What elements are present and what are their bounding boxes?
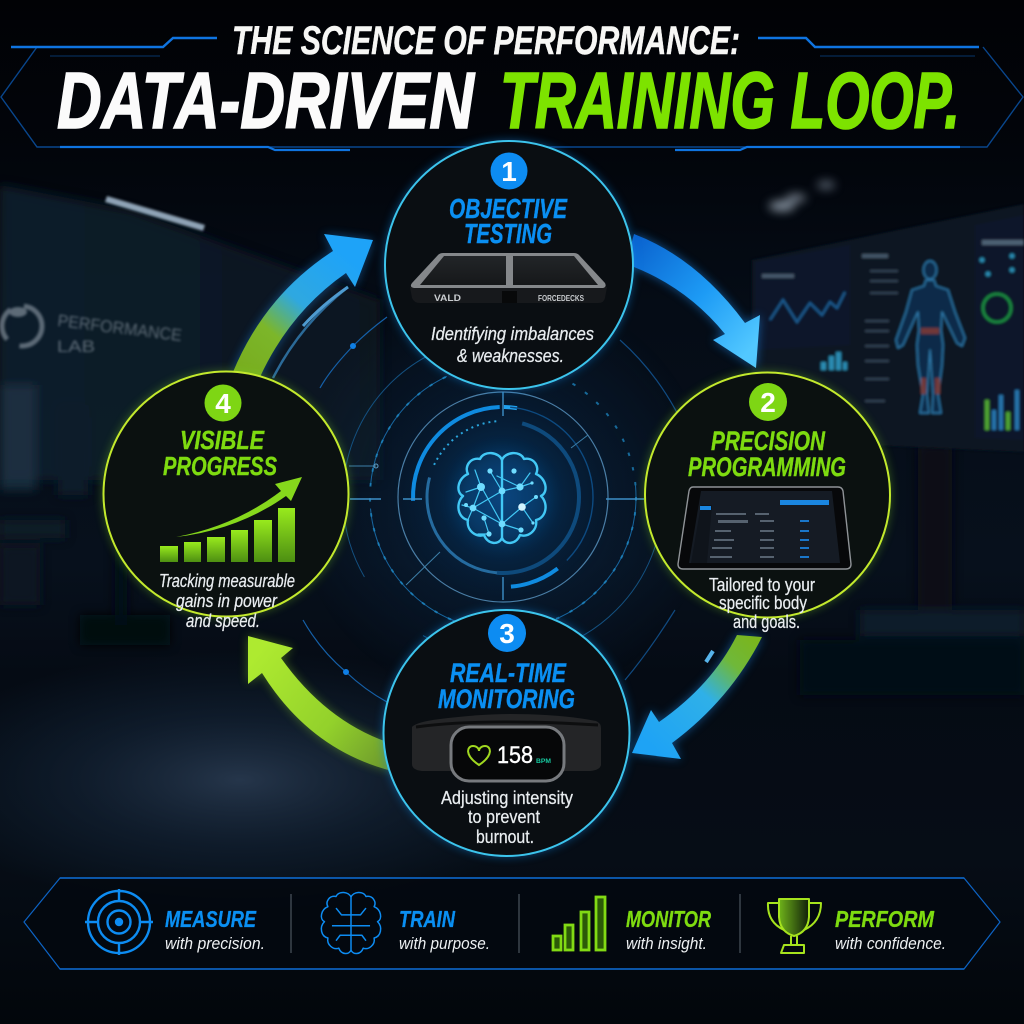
- panel: step 4 visible progress: [103, 371, 349, 631]
- description: Tracking measurable: [159, 571, 295, 591]
- heading: [163, 425, 278, 481]
- train item: with purpose.: [399, 934, 490, 953]
- background wall logo: [2, 306, 183, 356]
- panel: step 2 precision programming: [644, 372, 890, 632]
- arrow: step 1 to step 2: [626, 234, 760, 368]
- arrow: step 2 to step 3: [632, 635, 762, 759]
- arrow: step 4 to step 1: [233, 234, 373, 377]
- central HUD rings: [273, 287, 713, 707]
- background wall logo: PERFORMANCE: [57, 311, 183, 345]
- icon: rising bars: [553, 897, 605, 950]
- measure item: [85, 889, 265, 955]
- measure item: with precision.: [165, 934, 265, 953]
- panel: step 1 objective testing: [385, 141, 633, 389]
- measure item: MEASURE: [165, 906, 257, 932]
- force plate: FORCEDECKS: [538, 294, 585, 303]
- title line 2 white: DATA-DRIVEN: [57, 56, 476, 145]
- badge 4: 4: [215, 388, 231, 419]
- train item: TRAIN: [399, 906, 455, 932]
- perform item: [768, 899, 946, 953]
- description: specific body: [719, 593, 807, 613]
- growth bar chart with arrow: [160, 477, 302, 562]
- icon: circuit brain: [321, 892, 381, 954]
- badge 4: [204, 384, 242, 422]
- description: [159, 571, 295, 631]
- heading: MONITORING: [438, 684, 575, 714]
- monitor item: [553, 897, 711, 953]
- background body scan figure: [896, 261, 965, 413]
- badge 1: 1: [501, 156, 517, 187]
- description: burnout.: [476, 827, 534, 847]
- perform item: PERFORM: [835, 906, 935, 932]
- tablet: [678, 487, 851, 569]
- description: Identifying imbalances: [431, 324, 594, 344]
- heading: PROGRAMMING: [688, 452, 846, 482]
- title line 1: THE SCIENCE OF PERFORMANCE:: [232, 19, 740, 63]
- heading: REAL-TIME: [450, 658, 567, 688]
- arrow: step 3 to step 4: [248, 636, 392, 771]
- heart rate strap: BPM: [536, 759, 551, 765]
- heart rate strap: [412, 714, 601, 781]
- background dashboard screen: [752, 204, 1024, 452]
- description: [431, 324, 594, 366]
- description: and goals.: [733, 612, 800, 632]
- heading: OBJECTIVE: [449, 193, 568, 224]
- perform item: with confidence.: [835, 934, 946, 953]
- badge 3: [488, 614, 526, 652]
- description: Adjusting intensity: [441, 788, 573, 808]
- title frame: [1, 38, 1023, 150]
- heading: TESTING: [464, 218, 552, 249]
- background wall logo: LAB: [57, 337, 95, 356]
- badge 2: [749, 383, 787, 421]
- description: and speed.: [186, 611, 260, 631]
- force plate: [410, 253, 607, 303]
- heading: VISIBLE: [180, 425, 265, 455]
- monitor item: MONITOR: [626, 906, 711, 932]
- description: [709, 575, 815, 632]
- panel: step 3 real-time monitoring: [384, 610, 630, 856]
- icon: target: [85, 889, 153, 955]
- heading: PRECISION: [711, 426, 825, 456]
- badge 1: [490, 152, 528, 190]
- description: [441, 788, 573, 847]
- badge 2: 2: [760, 387, 776, 418]
- monitor item: with insight.: [626, 934, 707, 953]
- description: & weaknesses.: [457, 346, 564, 366]
- train item: [321, 892, 490, 954]
- description: Tailored to your: [709, 575, 815, 595]
- icon: trophy: [768, 899, 821, 953]
- heart rate strap: 158: [497, 742, 533, 769]
- description: gains in power: [176, 591, 278, 611]
- title: [57, 19, 960, 145]
- force plate: VALD: [434, 293, 462, 303]
- heading: [688, 426, 846, 482]
- brain icon: [454, 450, 550, 546]
- heading: [449, 193, 568, 249]
- bottom summary banner: [24, 878, 1000, 969]
- badge 3: 3: [499, 618, 515, 649]
- heading: [438, 658, 575, 714]
- heading: PROGRESS: [163, 451, 278, 481]
- description: to prevent: [468, 807, 540, 827]
